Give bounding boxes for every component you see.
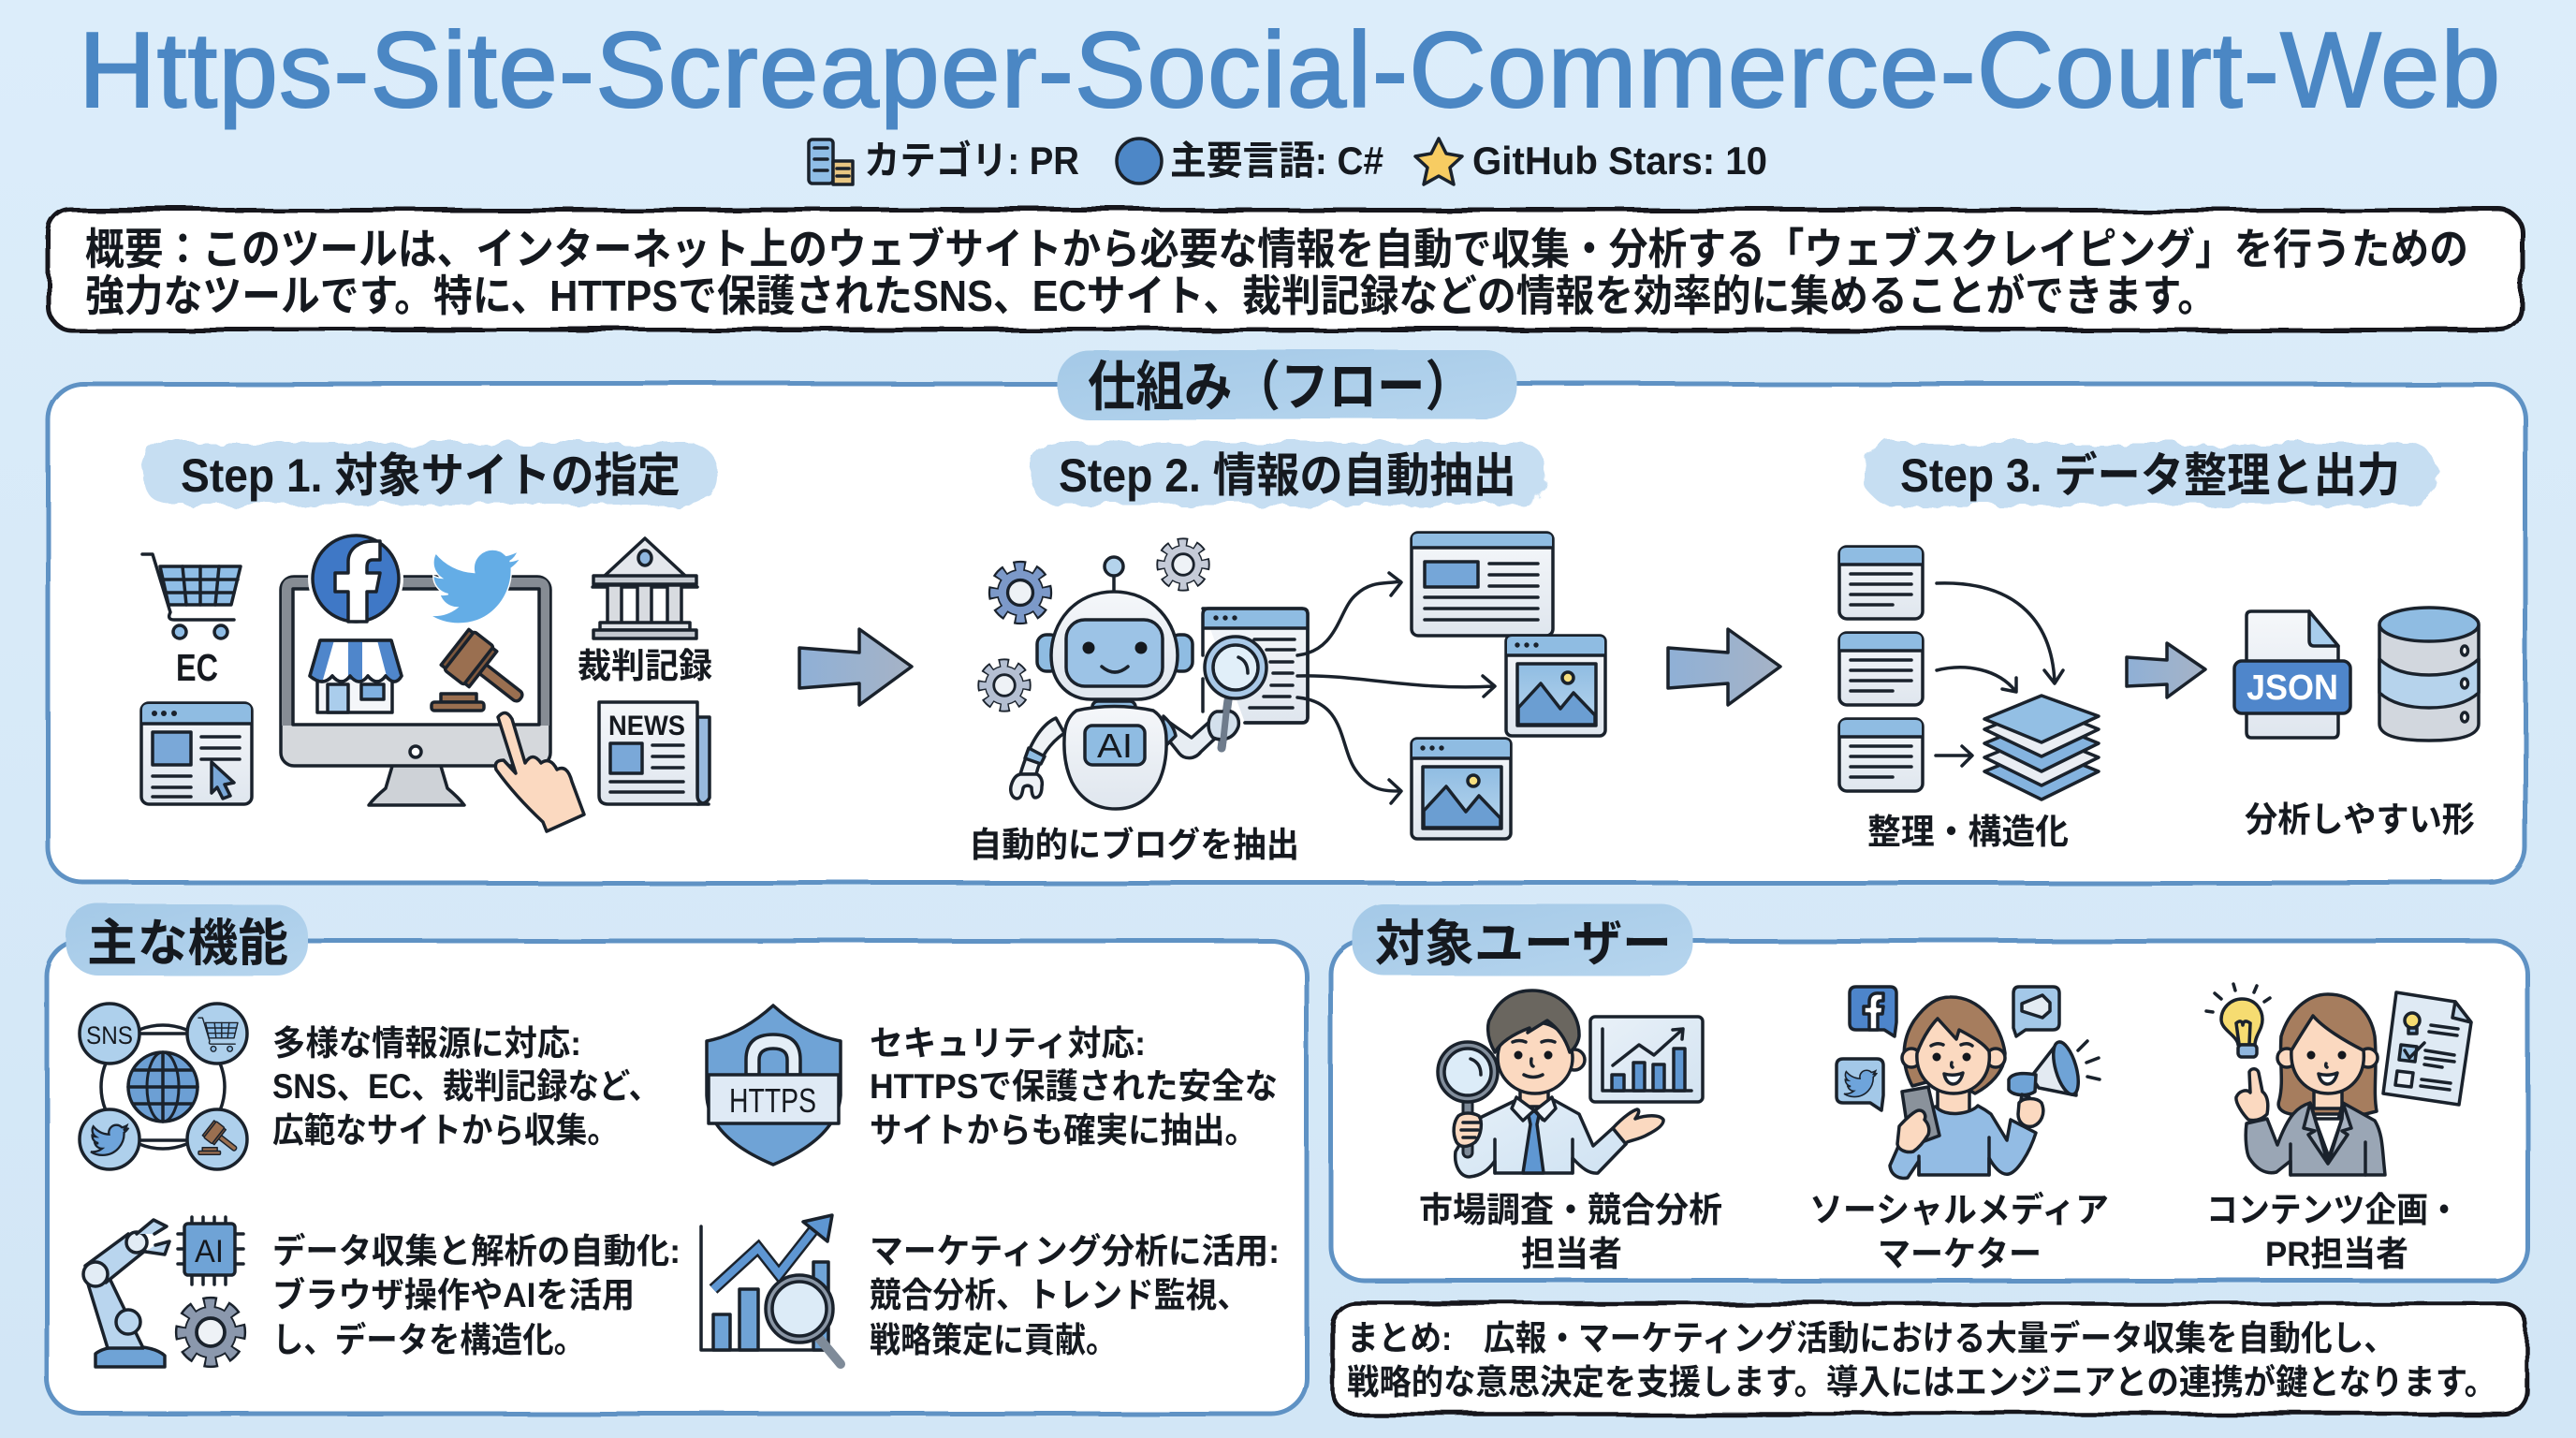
icon: network of sources [80,1004,247,1169]
caption: market researcher: 市場調査・競合分析 [1419,1191,1722,1229]
feature text: security: HTTPSで保護された安全な [870,1067,1278,1106]
icon: network of sources: SNS [86,1021,133,1049]
summary box [1332,1303,2526,1414]
shirt [1456,1100,1626,1177]
sweater [1890,1106,2036,1178]
icon: twitter bird [430,550,520,624]
features heading [66,904,308,976]
feature text: marketing: マーケティング分析に活用: [870,1232,1280,1270]
feature text: automation [272,1231,681,1359]
flow heading: 仕組み（フロー） [1088,357,1473,418]
tie [1523,1111,1544,1173]
arrow: step 2 to 3 [1668,629,1780,705]
icon: storefront [310,640,402,712]
hand [1897,1110,1929,1152]
neck [1938,1086,1969,1114]
icon: newspaper: NEWS [608,711,685,741]
jacket [2246,1103,2385,1175]
person: market researcher [1438,990,1703,1177]
features heading: 主な機能 [87,916,288,972]
icon: newspaper [599,702,710,804]
facial features [2306,1050,2346,1084]
icon: robot arm, chip and gear: AI [195,1234,224,1269]
icon: JSON file: JSON [2247,668,2338,708]
feature text: security [870,1024,1278,1150]
stars label: GitHub Stars: 10 [1472,139,1767,183]
step 3 heading: Step 3. データ整理と出力 [1900,449,2400,502]
caption: content planner: コンテンツ企画・ [2206,1191,2460,1229]
blouse [2315,1119,2342,1157]
feature text: marketing: 戦略策定に貢献。 [870,1321,1117,1359]
court records label: 裁判記録 [578,647,712,685]
icon: star [1415,139,1462,184]
person: social media marketer [1837,987,2100,1178]
icon: category [809,139,853,184]
robot left arm [1020,718,1064,774]
icon: image window B [1506,636,1605,736]
caption: organize and structure: 整理・構造化 [1867,813,2069,851]
feature text: sources: 広範なサイトから収集。 [272,1111,619,1150]
feature text: security: サイトからも確実に抽出。 [870,1111,1257,1150]
feature text: automation: ブラウザ操作やAIを活用 [272,1275,635,1314]
target users heading [1353,904,1693,976]
caption: automatic extraction: 自動的にブログを抽出 [969,825,1299,864]
panel: main features [47,904,1307,1414]
robot right arm [1164,718,1217,758]
icon: database [2379,608,2479,741]
icon: document 2 [1839,633,1923,705]
caption: market researcher: 担当者 [1521,1235,1622,1273]
icon: marketing chart [701,1215,841,1364]
icon: pointing hand [495,712,584,831]
hair [1488,990,1579,1052]
hair [1904,997,2005,1093]
icon: image window C [1412,739,1511,839]
icon: document 1 [1839,547,1923,619]
category label: カテゴリ: PR [864,139,1079,183]
open hand [1613,1109,1663,1144]
arrow: step 1 to 2 [799,629,912,705]
feature text: automation: データ収集と解析の自動化: [272,1231,681,1270]
icon: light bulb [2206,984,2270,1057]
icon: planning document [2383,992,2471,1105]
panel: flow [48,350,2525,883]
face [1564,1049,1585,1070]
panel: target users [1331,904,2527,1281]
arrows: merge [1936,583,2063,766]
face [1902,1049,1921,1067]
feature text: marketing: 競合分析、トレンド監視、 [870,1276,1249,1314]
step 1 heading: Step 1. 対象サイトの指定 [181,449,681,502]
lapels [2304,1103,2351,1164]
icon: document under magnifier [1203,609,1308,748]
face [2277,1049,2296,1067]
icon: robot [1011,557,1217,809]
hair [2278,994,2377,1114]
icon: document 3 [1839,719,1923,791]
icon: facebook [311,534,401,624]
icon: robot arm, chip and gear [83,1217,243,1367]
icon: HTTPS shield: HTTPS [729,1081,816,1120]
EC label: EC [176,646,218,689]
feature text: sources: 多様な情報源に対応: [272,1024,581,1063]
icon: gears [983,543,1206,708]
facial features [1513,1041,1555,1077]
icon: courthouse [593,538,697,638]
icon: monitor with site logos [281,534,584,831]
icon: layer stack [1984,696,2099,800]
step 2 heading: Step 2. 情報の自動抽出 [1059,449,1516,502]
hand pointing [2236,1069,2268,1121]
icon: shopping cart [142,554,241,638]
collar [1512,1097,1556,1121]
feature text: automation: し、データを構造化。 [272,1320,585,1359]
language label: 主要言語: C# [1170,139,1383,183]
caption: market researcher [1419,1191,1722,1273]
summary text line 1: まとめ: 広報・マーケティング活動における大量データ収集を自動化し、 [1347,1318,2395,1357]
icon: language dot [1117,139,1162,183]
icon: browser window [141,703,252,804]
icon: gavel [432,628,535,718]
social bubbles [1837,987,2059,1110]
icon: article window [1412,533,1553,636]
facial features [1931,1044,1972,1084]
caption: analysis-friendly form: 分析しやすい形 [2245,800,2475,839]
megaphone [2009,1039,2100,1126]
person: content planner [2206,984,2471,1175]
feature text: security: セキュリティ対応: [870,1024,1146,1063]
chart board [1590,1017,1703,1102]
arrows: extraction [1297,573,1495,803]
phone [1902,1087,1939,1142]
title: Https-Site-Screaper-Social-Commerce-Court-Web [79,11,2500,130]
feature text: sources [272,1024,660,1150]
neck [1520,1086,1548,1107]
neck [2314,1086,2342,1108]
arrow: to output [2127,643,2205,697]
caption: social media marketer: マーケター [1878,1235,2042,1273]
feature text: marketing [870,1232,1280,1359]
magnifier [1438,1042,1498,1152]
overview text line 2: 強力なツールです。特に、HTTPSで保護されたSNS、ECサイト、裁判記録などの情報を効率的に集めることができます。 [85,271,2217,320]
target users heading: 対象ユーザー [1375,917,1672,972]
icon: HTTPS shield [707,1005,841,1165]
feature text: sources: SNS、EC、裁判記録など、 [272,1067,660,1106]
overview box [49,210,2522,330]
summary text line 2: 戦略的な意思決定を支援します。導入にはエンジニアとの連携が鍵となります。 [1347,1363,2496,1401]
caption: content planner [2206,1191,2460,1273]
caption: social media marketer [1809,1190,2109,1273]
caption: content planner: PR担当者 [2265,1235,2408,1273]
icon: robot: AI [1097,726,1133,765]
icon: JSON file [2234,611,2350,738]
caption: social media marketer: ソーシャルメディア [1809,1190,2109,1229]
metadata row [809,139,1767,184]
